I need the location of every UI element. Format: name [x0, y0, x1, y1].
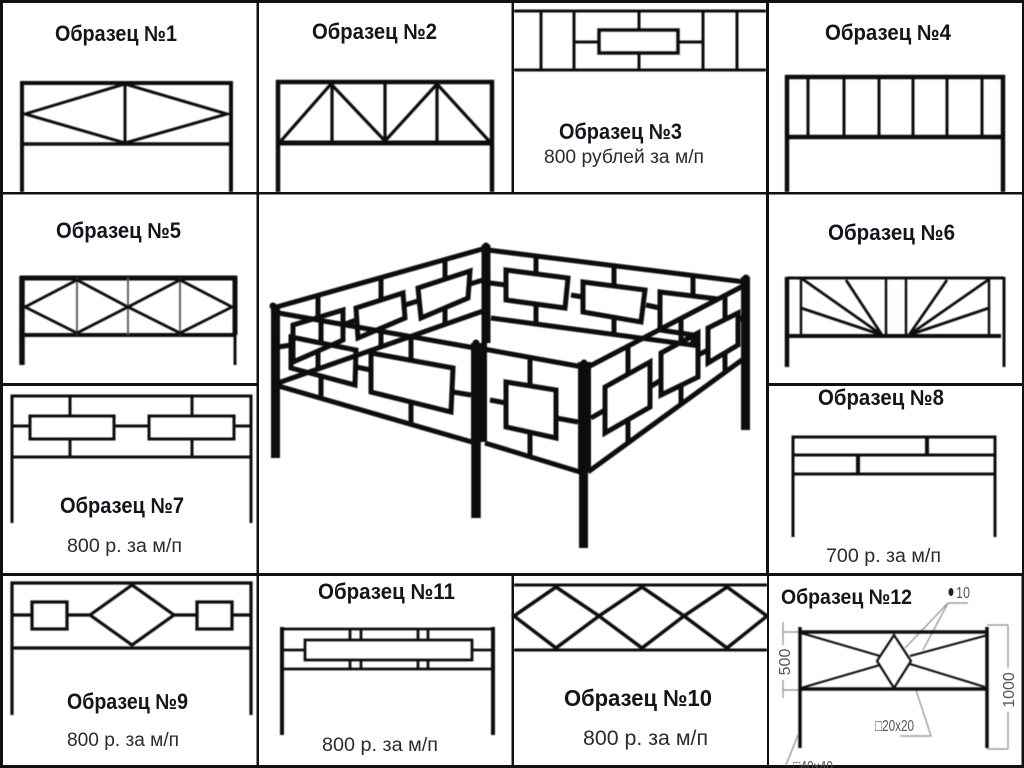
heading: sample 5: Образец №5 — [56, 218, 181, 243]
panel: sample 8 — [769, 385, 1022, 573]
heading: sample 11: Образец №11 — [318, 579, 455, 604]
heading: sample 1: Образец №1 — [55, 21, 177, 46]
fence drawing 10 — [514, 585, 767, 650]
fence drawing 12 — [800, 627, 988, 748]
panel: sample 7 — [3, 386, 256, 573]
heading: sample 6: Образец №6 — [828, 220, 955, 245]
panel: sample 6 — [769, 194, 1022, 383]
panel: central photo of a square fence — [259, 194, 766, 573]
fence drawing 7 — [12, 396, 251, 523]
panel: sample 12 technical drawing — [769, 576, 1022, 765]
heading: sample 7: Образец №7 — [60, 493, 184, 518]
heading: sample 9: Образец №9 — [67, 689, 188, 714]
heading: sample 4: Образец №4 — [825, 20, 951, 45]
panel: sample 2 — [259, 3, 512, 192]
fence drawing 8 — [793, 437, 995, 537]
panel: sample 4 — [769, 3, 1022, 192]
front left section — [273, 312, 475, 442]
price: sample 8: 700 р. за м/п — [826, 545, 941, 567]
panel: sample 9 — [3, 576, 256, 765]
back posts — [482, 242, 490, 343]
fence drawing 5 — [20, 276, 237, 365]
fence drawing 2 — [278, 82, 492, 192]
price: sample 7: 800 р. за м/п — [67, 535, 182, 557]
panel: sample 11 — [259, 576, 512, 765]
panel: sample 10 — [514, 576, 767, 765]
fence drawing 3 — [514, 11, 766, 70]
panel: sample 3 — [514, 3, 766, 192]
fence drawing 4 — [787, 77, 1003, 192]
fence drawing 11 — [282, 627, 493, 735]
heading: sample 2: Образец №2 — [312, 19, 437, 44]
fence drawing 1 — [22, 83, 231, 192]
front middle section — [478, 348, 583, 472]
heading: sample 12: Образец №12 — [781, 586, 912, 609]
panel: sample 1 — [3, 3, 256, 192]
price: sample 3: 800 рублей за м/п — [544, 146, 704, 168]
heading: sample 3: Образец №3 — [559, 119, 682, 144]
fence drawing 6 — [787, 277, 1004, 367]
label: rod diameter: 10 — [956, 585, 970, 602]
heading: sample 8: Образец №8 — [818, 385, 944, 410]
icon: rod diameter dot — [948, 588, 954, 596]
dimension lines — [783, 603, 1008, 765]
price: sample 10: 800 р. за м/п — [583, 727, 708, 750]
right section — [588, 285, 746, 472]
fence illustration — [270, 242, 750, 548]
label: height 1000: 1000 — [1001, 672, 1018, 708]
heading: sample 10: Образец №10 — [564, 685, 712, 711]
label: height 500: 500 — [777, 649, 794, 675]
fence drawing 9 — [12, 583, 251, 715]
back left section — [273, 248, 486, 383]
price: sample 11: 800 р. за м/п — [322, 734, 438, 756]
price: sample 9: 800 р. за м/п — [67, 729, 179, 751]
corner posts — [270, 274, 750, 548]
panel: sample 5 — [3, 194, 256, 383]
label: profile 20x20: □20x20 — [875, 718, 914, 735]
back right section — [488, 250, 745, 346]
